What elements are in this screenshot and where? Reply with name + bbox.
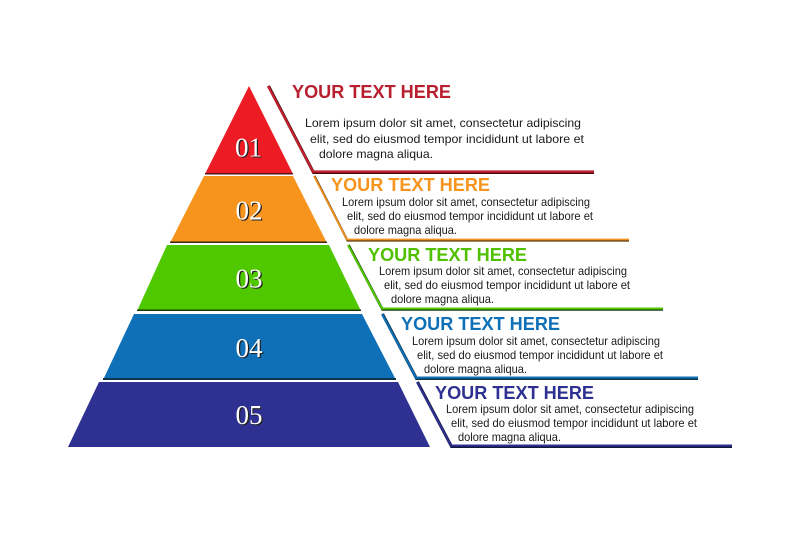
body 5: Lorem ipsum dolor sit amet, consectetur adipiscing bbox=[446, 402, 694, 416]
body 4: dolore magna aliqua. bbox=[424, 362, 527, 376]
body 2 bbox=[342, 195, 594, 237]
tier 4 blue: 04 bbox=[237, 334, 264, 364]
connector 4 bbox=[382, 314, 698, 378]
body 1: Lorem ipsum dolor sit amet, consectetur adipiscing bbox=[305, 116, 581, 130]
body 2: dolore magna aliqua. bbox=[354, 223, 457, 237]
heading 4: YOUR TEXT HERE bbox=[401, 314, 560, 334]
body 3: elit, sed do eiusmod tempor incididunt ut labore et bbox=[384, 278, 631, 292]
body 5: dolore magna aliqua. bbox=[458, 430, 561, 444]
tier 1 red bbox=[205, 86, 293, 174]
tier 2 orange bbox=[170, 176, 327, 243]
body 2: elit, sed do eiusmod tempor incididunt ut labore et bbox=[347, 209, 594, 223]
tier 1 red: 01 bbox=[235, 132, 262, 162]
tier 2 orange: 02 bbox=[237, 197, 264, 227]
connector 1 bbox=[268, 86, 594, 172]
body 1: dolore magna aliqua. bbox=[319, 147, 433, 161]
item 3 bbox=[348, 245, 663, 310]
pyramid bbox=[68, 86, 430, 447]
heading 1: YOUR TEXT HERE bbox=[292, 82, 451, 102]
tier 4 blue: 04 bbox=[236, 333, 263, 363]
item 2 bbox=[314, 175, 629, 240]
tier 3 green: 03 bbox=[237, 265, 264, 295]
tier 2 orange: 02 bbox=[236, 196, 262, 226]
body 4: elit, sed do eiusmod tempor incididunt ut labore et bbox=[417, 348, 664, 362]
body 1: elit, sed do eiusmod tempor incididunt ut labore et bbox=[310, 132, 585, 146]
body 5: elit, sed do eiusmod tempor incididunt ut labore et bbox=[451, 416, 698, 430]
heading 5: YOUR TEXT HERE bbox=[435, 383, 594, 403]
tier 5 navy: 05 bbox=[237, 401, 264, 431]
body 1 bbox=[305, 116, 585, 161]
tier 5 navy: 05 bbox=[236, 400, 262, 430]
body 3: Lorem ipsum dolor sit amet, consectetur adipiscing bbox=[379, 264, 627, 278]
tier 3 green: 03 bbox=[236, 264, 262, 294]
tier 3 green bbox=[137, 245, 361, 311]
connector 2 bbox=[314, 176, 629, 240]
connector 3 bbox=[348, 245, 663, 310]
tier 5 navy bbox=[68, 382, 430, 447]
body 5 bbox=[446, 402, 698, 444]
tier 1 red: 01 bbox=[236, 134, 263, 164]
connector 5 bbox=[417, 382, 732, 446]
item 1 bbox=[268, 82, 594, 172]
heading 2: YOUR TEXT HERE bbox=[331, 175, 490, 195]
body 3 bbox=[379, 264, 631, 306]
item 5 bbox=[417, 382, 732, 446]
heading 3: YOUR TEXT HERE bbox=[368, 245, 527, 265]
item 4 bbox=[382, 314, 698, 378]
tier 4 blue bbox=[103, 314, 396, 380]
body 3: dolore magna aliqua. bbox=[391, 292, 494, 306]
body 2: Lorem ipsum dolor sit amet, consectetur adipiscing bbox=[342, 195, 590, 209]
body 4 bbox=[412, 334, 664, 376]
body 4: Lorem ipsum dolor sit amet, consectetur adipiscing bbox=[412, 334, 660, 348]
